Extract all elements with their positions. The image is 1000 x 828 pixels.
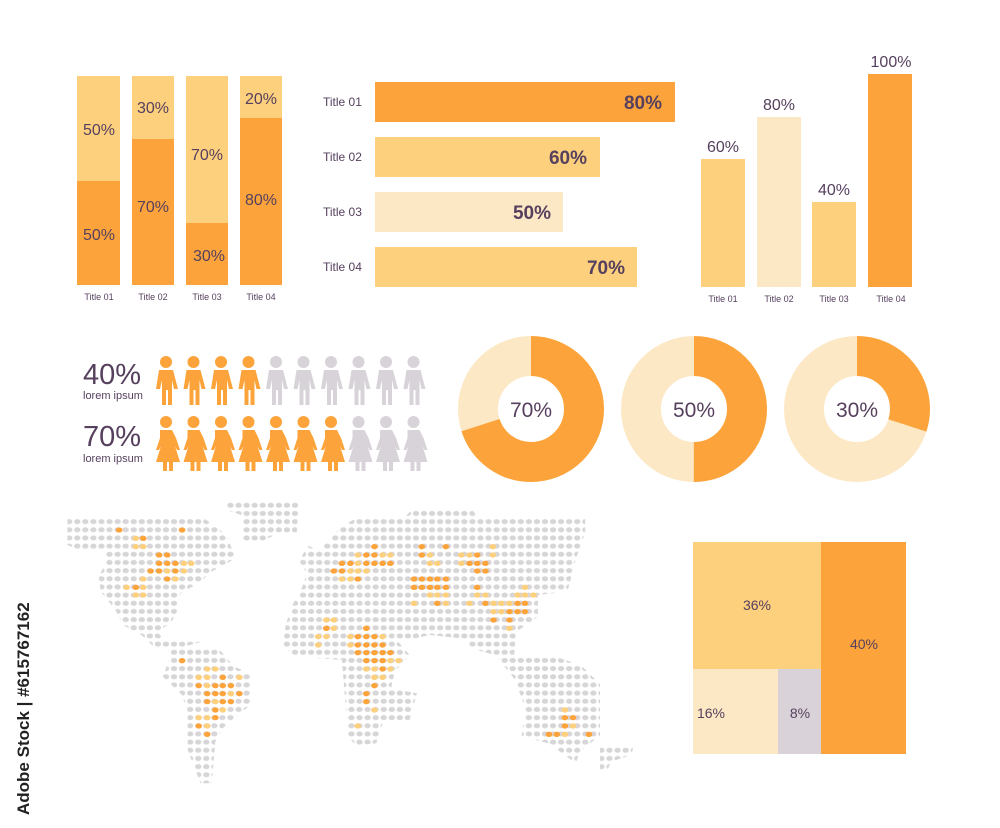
horizontal bar chart: 60% [549, 148, 587, 169]
treemap chart: 8% [790, 705, 810, 721]
stacked bar chart: Title 03 [192, 292, 222, 302]
vertical bar chart: Title 02 [764, 294, 794, 304]
stacked bar chart: 70% [137, 199, 169, 216]
horizontal bar chart: Title 01 [323, 95, 362, 109]
dotted world map [67, 502, 633, 783]
donut chart 50%: 50% [673, 399, 715, 422]
stacked bar chart: 30% [137, 100, 169, 117]
donut chart 30% [804, 356, 910, 462]
stacked bar chart: Title 01 [84, 292, 114, 302]
stacked bar chart [77, 76, 282, 302]
horizontal bar chart: Title 03 [323, 205, 362, 219]
donut chart 70%: 70% [510, 399, 552, 422]
stacked bar chart: 70% [191, 147, 223, 164]
side caption: Adobe Stock | #615767162 [14, 602, 33, 815]
horizontal bar chart: Title 02 [323, 150, 362, 164]
treemap chart [693, 542, 906, 754]
people pictogram: 40%: lorem ipsum [83, 390, 143, 402]
treemap chart: 36% [743, 597, 771, 613]
stacked bar chart: 50% [83, 122, 115, 139]
treemap chart: 16% [697, 705, 725, 721]
stacked bar chart: 50% [83, 227, 115, 244]
vertical bar chart: Title 01 [708, 294, 738, 304]
horizontal bar chart [323, 82, 675, 287]
vertical bar chart: 80% [763, 97, 795, 114]
horizontal bar chart: 80% [624, 93, 662, 114]
stacked bar chart: Title 04 [246, 292, 276, 302]
stacked bar chart: 80% [245, 192, 277, 209]
vertical bar chart: 40% [818, 182, 850, 199]
vertical bar chart [701, 54, 912, 304]
donut chart 50% [641, 356, 747, 462]
stacked bar chart: 30% [193, 248, 225, 265]
treemap chart: 40% [850, 636, 878, 652]
horizontal bar chart: 50% [513, 203, 551, 224]
people pictogram: 70%: lorem ipsum [83, 453, 143, 465]
vertical bar chart: Title 04 [876, 294, 906, 304]
horizontal bar chart: 70% [587, 258, 625, 279]
stacked bar chart: Title 02 [138, 292, 168, 302]
stacked bar chart: 20% [245, 91, 277, 108]
vertical bar chart: 100% [871, 54, 911, 71]
vertical bar chart: 60% [707, 139, 739, 156]
vertical bar chart: Title 03 [819, 294, 849, 304]
horizontal bar chart: Title 04 [323, 260, 362, 274]
donut chart 70% [478, 356, 584, 462]
donut chart 30%: 30% [836, 399, 878, 422]
people pictogram: 40% [83, 356, 426, 405]
people pictogram: 40%: 40% [83, 359, 141, 391]
people pictogram: 70%: 70% [83, 421, 141, 453]
people pictogram: 70% [83, 416, 428, 471]
